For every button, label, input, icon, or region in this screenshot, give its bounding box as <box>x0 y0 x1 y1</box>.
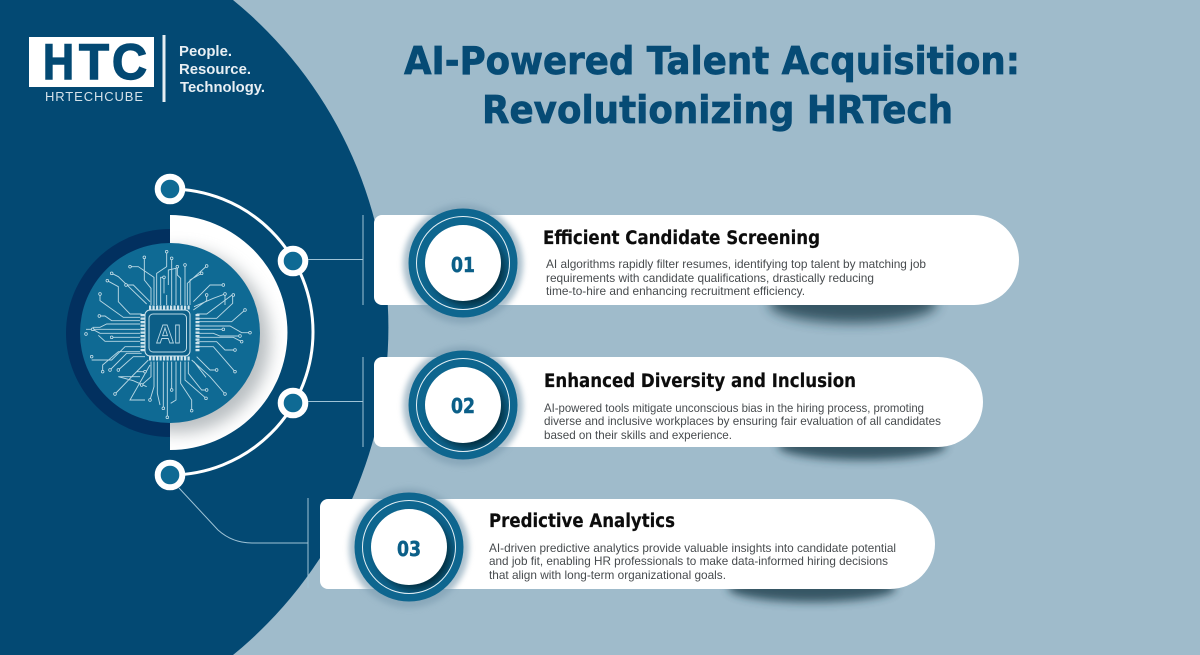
card 2 text: Enhanced Diversity and Inclusion <box>544 371 856 392</box>
card 2 text: based on their skills and experience. <box>544 429 732 442</box>
title: AI-Powered Talent Acquisition: <box>404 39 1020 83</box>
card 3 text: AI-driven predictive analytics provide valuable insights into candidate potential <box>489 542 896 555</box>
logo: Resource. <box>179 62 251 78</box>
card 1 text: AI algorithms rapidly filter resumes, identifying top talent by matching job <box>546 258 926 271</box>
card 1 text: Efficient Candidate Screening <box>543 228 820 249</box>
card 2 text: AI-powered tools mitigate unconscious bias in the hiring process, promoting <box>544 402 924 415</box>
title: Revolutionizing HRTech <box>482 88 953 132</box>
AI hub graphic <box>66 215 287 450</box>
number badge 02: 02 <box>451 394 475 418</box>
logo: H <box>43 34 74 90</box>
card 3 <box>320 488 935 608</box>
card 1 <box>374 204 1019 324</box>
card 1 text <box>543 228 926 298</box>
connector lines <box>179 215 363 588</box>
dark blue semicircle panel <box>0 0 388 655</box>
logo: C <box>112 34 147 90</box>
logo: T <box>79 34 109 90</box>
logo: People. <box>179 44 232 60</box>
logo: HRTECHCUBE <box>45 89 143 104</box>
logo <box>29 34 265 104</box>
card 2 text: diverse and inclusive workplaces by ensuring fair evaluation of all candidates <box>544 415 941 428</box>
card 3 text <box>489 511 896 582</box>
circuit traces <box>86 252 250 417</box>
card 2 <box>374 346 983 466</box>
card 3 text: that align with long-term organizational goals. <box>489 569 726 582</box>
number badge 03: 03 <box>397 537 421 561</box>
card 1 text: requirements with candidate qualifications, drastically reducing <box>546 272 874 285</box>
card 3 text: and job fit, enabling HR professionals to make data-informed hiring decisions <box>489 555 888 568</box>
AI chip: AI <box>156 319 181 349</box>
number badge 01: 01 <box>451 253 475 277</box>
logo: Technology. <box>180 80 265 96</box>
title <box>404 39 1020 132</box>
orbit arc with nodes <box>158 177 313 487</box>
card 1 text: time-to-hire and enhancing recruitment efficiency. <box>546 285 805 298</box>
number badge 03 <box>349 488 469 608</box>
circuit terminals <box>85 250 251 419</box>
card 2 text <box>544 371 941 442</box>
card 3 text: Predictive Analytics <box>489 511 675 532</box>
AI chip <box>142 308 198 358</box>
number badge 02 <box>403 346 523 466</box>
number badge 01 <box>403 204 523 324</box>
